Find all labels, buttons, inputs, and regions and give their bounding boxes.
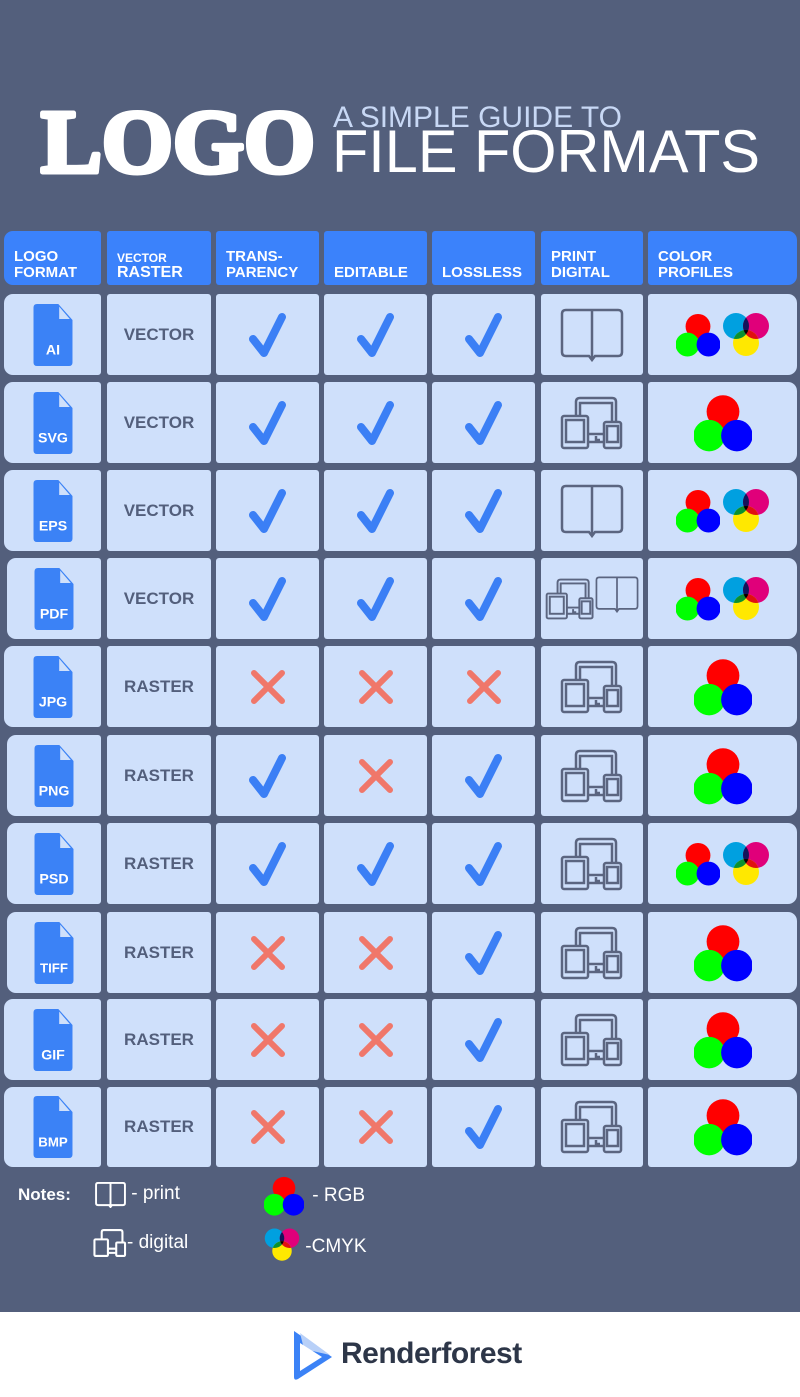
row: AI: AI [45,342,60,358]
legend: print: - print [131,1183,180,1204]
table header [4,231,797,285]
row: PDF: PDF [40,606,69,622]
row: PNG: PNG [39,783,69,799]
row: JPG: JPG [38,694,67,710]
row: TIFF: TIFF [40,960,68,975]
table header: PROFILES [658,264,733,281]
row: EPS: EPS [38,518,67,534]
row: EPS: VECTOR [124,500,194,520]
row: PDF [7,558,797,639]
legend: CMYK [264,1228,366,1261]
table header: PRINT [551,248,596,265]
row: SVG [4,382,797,463]
subtitle: a simple guide to: A SIMPLE GUIDE TO [333,101,622,134]
brand name: Renderforest [341,1337,522,1370]
row: PSD [7,823,797,904]
row: PNG [7,735,797,816]
row: GIF [4,999,797,1080]
legend: print [95,1182,180,1208]
row: TIFF [7,912,797,993]
table header: COLOR [658,248,712,265]
row: JPG: RASTER [124,676,194,696]
row: JPG [4,646,797,727]
row: SVG: SVG [38,430,67,446]
row: PSD: RASTER [124,854,194,872]
legend: digital: - digital [127,1232,188,1253]
legend: CMYK: -CMYK [305,1236,366,1257]
legend: RGB: - RGB [312,1185,365,1206]
row: SVG: VECTOR [124,412,194,432]
notes label: Notes: [18,1185,71,1204]
table header: LOGO [14,248,58,265]
legend: RGB [264,1176,365,1216]
table header: DIGITAL [551,264,610,281]
logo: renderforest [294,1331,522,1380]
row: PDF: VECTOR [124,588,194,608]
table header: PARENCY [226,264,298,281]
table header: EDITABLE [334,264,408,281]
legend: digital [93,1229,188,1257]
row: BMP: BMP [38,1134,67,1149]
row: GIF: GIF [41,1047,65,1063]
footer [0,1312,800,1397]
table header: FORMAT [14,264,77,281]
row: EPS [4,470,797,551]
row: BMP: RASTER [124,1117,194,1136]
row: TIFF: RASTER [124,942,194,962]
row: PNG: RASTER [124,766,194,784]
table header: VECTOR [117,251,167,265]
table header: LOSSLESS [442,264,522,281]
row: AI [4,294,797,375]
row: GIF: RASTER [124,1030,194,1048]
table header: TRANS- [226,248,283,265]
title [40,93,760,180]
table header: RASTER [117,264,183,281]
row: PSD: PSD [39,871,69,887]
row: AI: VECTOR [124,324,194,344]
row: BMP [4,1087,797,1167]
notes legend [18,1176,366,1261]
